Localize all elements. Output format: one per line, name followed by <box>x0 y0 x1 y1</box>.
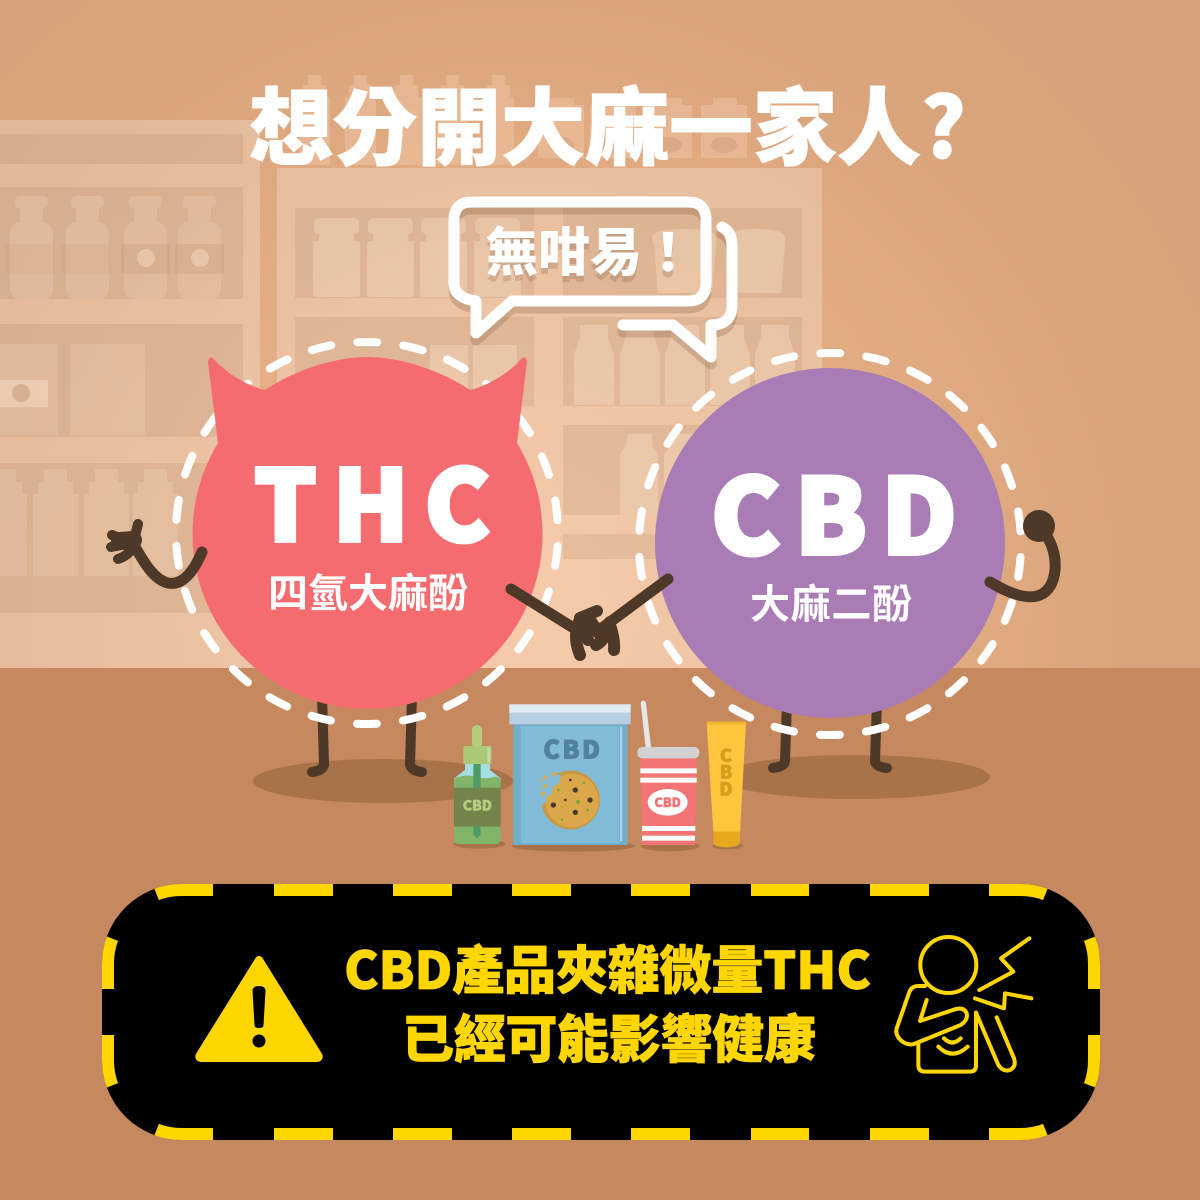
THC character <box>111 342 558 772</box>
warning text: CBD產品夾雜微量THC <box>344 929 871 1004</box>
pain icon <box>896 937 1031 1072</box>
THC label: THC <box>254 428 490 570</box>
warning panel <box>102 884 1100 1140</box>
cookie box <box>509 704 631 845</box>
cream tube: D <box>719 775 733 801</box>
THC dashed ring <box>176 342 558 724</box>
background wall <box>0 0 1200 668</box>
cream tube: B <box>720 759 732 785</box>
CBD character <box>639 353 1055 768</box>
floor <box>0 668 1200 1200</box>
character shadows <box>253 755 990 803</box>
background shelves <box>0 75 822 668</box>
CBD body <box>655 368 1005 718</box>
back bubble <box>623 227 732 357</box>
cookie box: CBD <box>543 731 600 767</box>
warning text <box>344 929 871 1073</box>
CBD chinese name: 大麻二酚 <box>750 572 912 630</box>
soda cup <box>637 703 699 845</box>
front bubble <box>454 202 706 333</box>
THC left arm <box>111 524 202 583</box>
cream tube <box>707 722 746 847</box>
dropper bottle <box>454 725 501 844</box>
CBD right arm with fist <box>990 510 1055 597</box>
product shadows <box>453 839 743 852</box>
cream tube: C <box>720 742 732 768</box>
panel background <box>102 884 1100 1140</box>
bubble text shadow: 無咁易！ <box>486 217 694 292</box>
title: 想分開大麻一家人? <box>249 62 966 183</box>
THC chinese name: 四氫大麻酚 <box>268 561 468 619</box>
THC legs <box>312 695 422 772</box>
CBD legs <box>773 700 887 768</box>
dropper bottle: CBD <box>463 796 492 816</box>
holding hands arms <box>511 579 668 655</box>
speech bubbles <box>454 202 732 364</box>
CBD products <box>453 703 746 852</box>
bubble shadows <box>454 209 732 364</box>
CBD dashed ring <box>639 353 1021 735</box>
warning text: 已經可能影響健康 <box>402 998 816 1073</box>
THC body with horns <box>192 357 542 709</box>
cookie <box>537 771 600 829</box>
hazard dashes <box>108 890 1094 1134</box>
warning triangle icon <box>199 960 319 1058</box>
soda cup: CBD <box>654 792 681 811</box>
CBD label: CBD <box>711 433 957 584</box>
bubble text: 無咁易！ <box>486 211 694 286</box>
